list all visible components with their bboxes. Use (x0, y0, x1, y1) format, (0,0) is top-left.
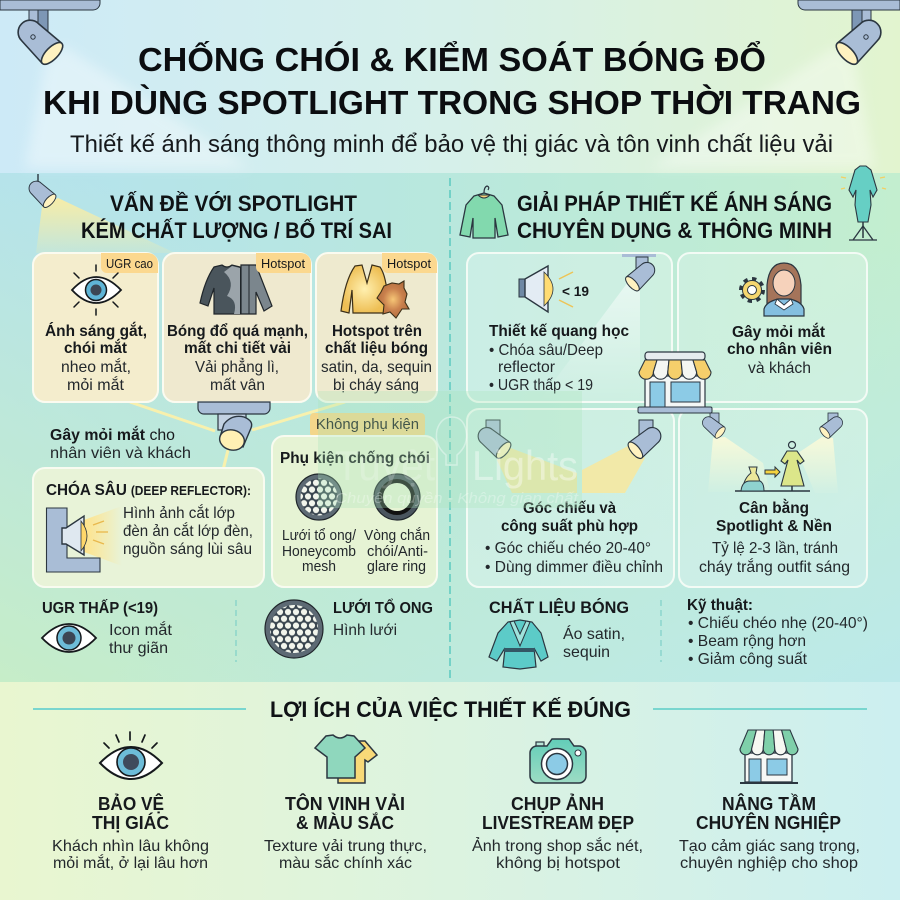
heading: CHÓA SÂU (DEEP REFLECTOR): (46, 480, 251, 499)
card: shadow (163, 253, 311, 402)
icon: central spotlight fixture (198, 402, 270, 453)
benefit: photo and livestream: LIVESTREAM ĐẸP (482, 813, 634, 833)
benefit: professional: CHUYÊN NGHIỆP (696, 812, 841, 833)
benefit: photo and livestream: không bị hotspot (496, 855, 621, 872)
icon: blouse and leather (341, 265, 409, 318)
tag: UGR cao (106, 257, 153, 271)
benefit: fabric and colour: & MÀU SẮC (296, 812, 394, 833)
caption: ring (364, 527, 430, 575)
divider: centre dashed line (449, 178, 451, 680)
caption: mesh: mesh (302, 559, 336, 575)
icon: dark clothes (200, 265, 272, 314)
watermark: Tuyệt (335, 442, 435, 489)
benefit: eye protection: mỏi mắt, ở lại lâu hơn (53, 853, 208, 872)
text: Bóng đổ quá mạnh, (167, 322, 308, 340)
light rays from central fixture (130, 402, 345, 470)
heading: LỢI ÍCH CỦA VIỆC THIẾT KẾ ĐÚNG (270, 697, 631, 722)
icon: honeycomb (265, 600, 323, 658)
text: chất liệu bóng (325, 340, 428, 357)
benefit: eye protection (52, 732, 209, 872)
benefit: professional (679, 730, 860, 872)
text: và khách (748, 360, 811, 377)
technique list: • Beam rộng hơn (688, 633, 806, 650)
text: chói mắt (64, 338, 128, 357)
callout: eye strain: Gây mỏi mắt cho (50, 425, 175, 444)
text: Góc chiếu và (523, 500, 616, 517)
light beam from small spotlight (36, 198, 175, 253)
icon: left spotlight (474, 420, 513, 461)
card: shiny hotspot (316, 253, 437, 402)
honeycomb block (265, 598, 433, 658)
panel: problems (25, 174, 437, 662)
callout: eye strain (50, 425, 191, 462)
light beams (497, 447, 577, 493)
text: công suất phù hợp (501, 518, 638, 535)
label: under 19: < 19 (562, 283, 589, 299)
technique list (687, 597, 868, 668)
text: cho nhân viên (727, 341, 832, 358)
text: • Góc chiếu chéo 20-40° (485, 540, 651, 557)
shiny material block (489, 598, 629, 669)
icon: satin robe (489, 620, 548, 669)
benefit: photo and livestream (472, 739, 643, 872)
title: KHI DÙNG SPOTLIGHT TRONG SHOP THỜI TRANG (43, 84, 861, 121)
benefit: fabric and colour: TÔN VINH VẢI (285, 793, 405, 814)
text: bị cháy sáng (333, 377, 419, 394)
tag: no accessory: Không phụ kiện (316, 417, 419, 433)
text: reflector (498, 359, 556, 376)
icon: camera (530, 739, 586, 783)
text: đèn ản cắt lớp đèn, (123, 521, 253, 540)
watermark: Chuyên quyền - Không gian chất (335, 490, 579, 507)
icon: mannequin with dress (841, 166, 886, 240)
icon: t-shirts (315, 735, 377, 783)
watermark: Lights (472, 442, 578, 489)
icon: person with gear (742, 263, 804, 316)
heading: Phụ kiện chống chói (280, 450, 430, 467)
icon: spotlight right (818, 413, 846, 440)
low UGR block: UGR THẤP (<19) (42, 598, 158, 617)
heading: KÉM CHẤT LƯỢNG / BỐ TRÍ SAI (81, 217, 392, 243)
honeycomb block: Hình lưới (333, 622, 397, 639)
honeycomb block: LƯỚI TỔ ONG (333, 598, 433, 617)
benefit: fabric and colour: Texture vải trung thực, (264, 838, 427, 855)
light beams (708, 437, 770, 492)
text: Gây mỏi mắt (732, 322, 826, 341)
text: Spotlight & Nền (716, 518, 832, 535)
subtitle: Thiết kế ánh sáng thông minh để bảo vệ thị giác và tôn vinh chất liệu vải (70, 131, 833, 158)
icon: bust, arrow and dress (735, 442, 810, 491)
icon: honeycomb mesh (296, 474, 342, 520)
low UGR block: thư giãn (109, 640, 168, 657)
caption: ring: glare ring (367, 559, 426, 575)
text (727, 322, 832, 377)
caption: ring: chói/Anti- (367, 544, 428, 560)
panel: solutions (460, 166, 886, 669)
icon: glaring eye (72, 265, 121, 315)
heading (81, 191, 392, 243)
heading: CHUYÊN DỤNG & THÔNG MINH (517, 218, 832, 243)
text (321, 323, 432, 394)
text: mỏi mắt (67, 375, 125, 394)
icon: small spotlight (622, 254, 659, 293)
tag (256, 253, 311, 273)
card: deep reflector (33, 468, 264, 587)
icon: spotlight top right (798, 0, 900, 68)
benefit: eye protection: THỊ GIÁC (92, 812, 169, 833)
icon: small spotlight (25, 174, 58, 209)
benefit: eye protection: Khách nhìn lâu không (52, 838, 209, 855)
card: glare (33, 253, 158, 402)
callout: eye strain: nhân viên và khách (50, 445, 191, 462)
icon: eye (100, 732, 162, 779)
shiny material block: CHẤT LIỆU BÓNG (489, 598, 629, 617)
heading: VẤN ĐỀ VỚI SPOTLIGHT (110, 191, 358, 216)
benefit: professional: chuyên nghiệp cho shop (680, 855, 858, 872)
text: Hình ảnh cắt lớp (123, 503, 235, 522)
icon: right spotlight (626, 420, 665, 461)
caption: ring: Vòng chắn (364, 527, 430, 544)
icon: spotlight left (699, 413, 727, 440)
tag (382, 253, 437, 273)
text: nheo mắt, (61, 357, 131, 376)
benefit: professional: Tạo cảm giác sang trọng, (679, 838, 860, 855)
benefit: photo and livestream: CHỤP ẢNH (511, 793, 604, 814)
icon: anti-glare ring (374, 474, 420, 520)
heading (517, 191, 832, 243)
caption: mesh: Honeycomb (282, 544, 356, 560)
text: cháy trắng outfit sáng (699, 557, 850, 576)
benefit: eye protection: BẢO VỆ (98, 793, 164, 814)
benefit: professional: NÂNG TẦM (722, 793, 816, 814)
caption: mesh (282, 528, 357, 575)
caption: mesh: Lưới tổ ong/ (282, 528, 357, 544)
tag: Hotspot (387, 257, 432, 271)
text (489, 323, 629, 394)
text: Vải phẳng lì, (195, 357, 279, 376)
panel: benefits (33, 697, 867, 872)
text: Tỷ lệ 2-3 lần, tránh (712, 540, 838, 557)
text: Thiết kế quang học (489, 323, 629, 340)
shiny material block: sequin (563, 644, 610, 661)
title (43, 40, 861, 121)
benefit: photo and livestream: Ảnh trong shop sắc nét, (472, 836, 643, 855)
text: Cân bằng (739, 498, 809, 517)
benefit: fabric and colour: màu sắc chính xác (279, 853, 412, 872)
icon: relaxed eye (42, 624, 96, 652)
card: balance (679, 409, 867, 587)
card: staff eye strain (678, 253, 867, 402)
icon: reflector (519, 266, 573, 312)
benefit: fabric and colour (264, 735, 427, 872)
icon: shop (638, 352, 712, 413)
card: anti-glare accessories (272, 436, 437, 587)
tag (101, 253, 158, 273)
shiny material block: Áo satin, (563, 624, 625, 643)
tag: Hotspot (261, 257, 306, 271)
text: satin, da, sequin (321, 359, 432, 376)
technique list: • Giảm công suất (688, 651, 808, 668)
icon: shop (740, 730, 798, 783)
text: nguồn sáng lùi sâu (123, 541, 252, 558)
title: CHỐNG CHÓI & KIỂM SOÁT BÓNG ĐỔ (138, 40, 766, 78)
card: angle and power (467, 409, 674, 587)
icon: spotlight top left (0, 0, 100, 68)
text (699, 498, 850, 576)
text: • Dùng dimmer điều chỉnh (485, 559, 663, 576)
text: mất chi tiết vải (184, 340, 291, 357)
text (485, 500, 663, 576)
watermark (318, 391, 582, 508)
technique list: Kỹ thuật: (687, 597, 753, 614)
text: mất vân (210, 377, 265, 394)
technique list: • Chiếu chéo nhẹ (20-40°) (688, 615, 868, 632)
text: • Chóa sâu/Deep (489, 342, 603, 359)
text: • UGR thấp < 19 (489, 377, 593, 394)
text (167, 322, 308, 394)
heading: GIẢI PHÁP THIẾT KẾ ÁNH SÁNG (517, 191, 832, 216)
text: Ánh sáng gắt, (45, 321, 147, 340)
text (123, 503, 253, 558)
low UGR block: Icon mắt (109, 620, 173, 639)
card: optical design (467, 253, 672, 402)
low UGR block (42, 598, 173, 657)
icon: reflector cross-section (46, 506, 122, 572)
icon: sweater on hanger (460, 186, 508, 238)
text (45, 321, 147, 394)
tag: no accessory (310, 413, 425, 437)
text: Hotspot trên (332, 323, 422, 340)
